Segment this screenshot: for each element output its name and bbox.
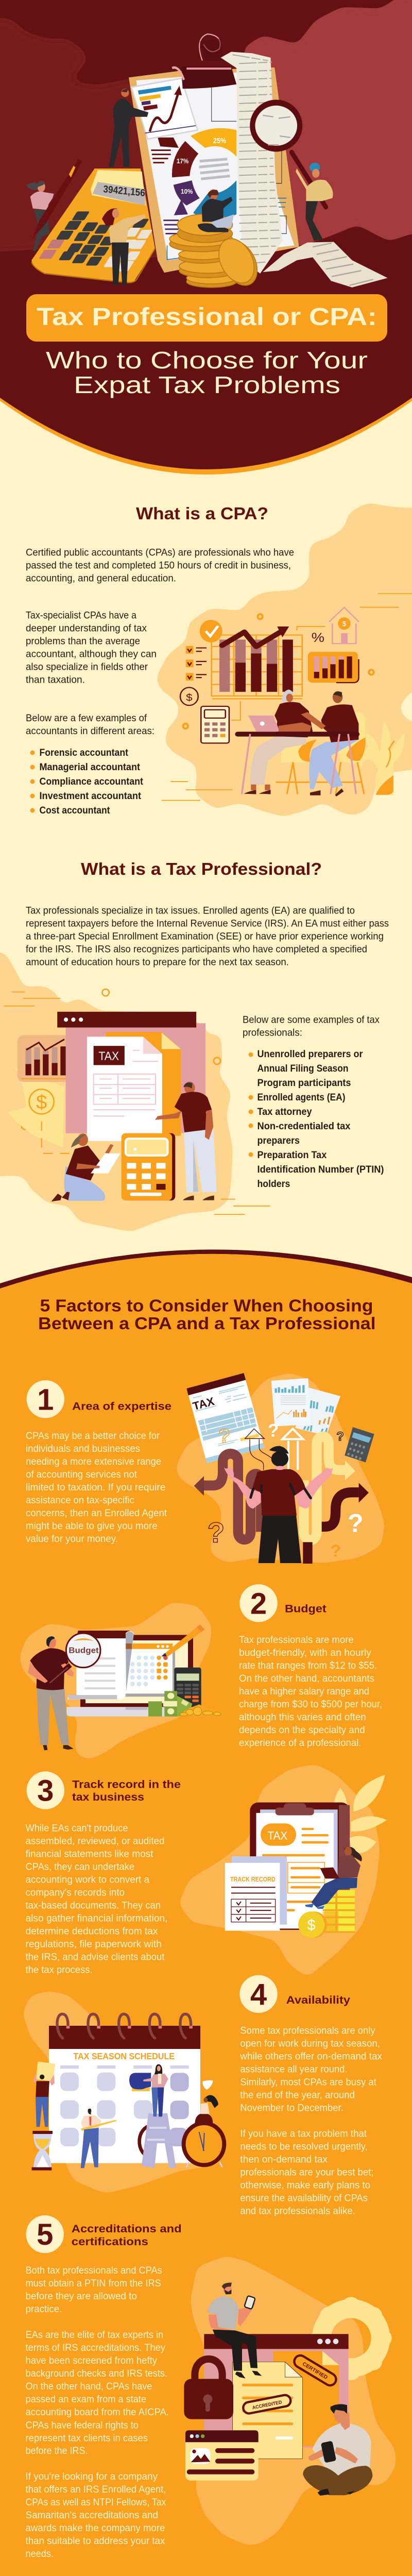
list: accountant types: Forensic accountant [39,747,128,758]
heading: What is a Tax Professional? [81,859,322,878]
panel: what is a tax professional [0,859,389,1232]
factor text: CPAs may be a better choice for [26,1430,160,1442]
icon: calculator [31,168,155,282]
person: man holding magnifier [296,163,333,241]
factor text: accounting board from the AICPA. [26,2406,169,2418]
person: man with magnifier [28,1636,74,1750]
list: tax professional types: Program participants [258,1077,351,1089]
factor text: needs to be resolved urgently, [240,2141,368,2152]
money and coins [148,1691,221,1717]
factor title: Accreditations and [72,2223,182,2235]
icon: clipboard with charts [129,67,299,273]
factor text: value for your money. [26,1533,118,1545]
certified stamp [292,2353,338,2387]
factor text: of accounting services not [26,1469,138,1480]
calendar [49,2014,200,2163]
factor text: concerns, then an Enrolled Agent [26,1507,167,1519]
illustration: accreditation window, lock, gear and people [184,2256,396,2545]
text: tax specialist CPAs: accountant, although they can [26,648,157,659]
icon: dollar circle: $ [186,692,193,703]
list: tax professional types: preparers [258,1135,300,1146]
text: definition: for the IRS. The IRS also recognizes participants who have completed a specified [26,944,367,955]
person: woman on clock [200,2080,218,2114]
factor text: If you have a tax problem that [240,2128,367,2139]
subtitle: Expat Tax Problems [74,371,340,398]
text: definition: amount of education hours to prepare for the next tax season. [26,956,289,968]
factor text: Samaritan's accreditations and [26,2510,158,2521]
person: standing on calculator [109,89,148,167]
factor text [26,1823,168,1976]
icon: red ring behind ladder [140,2126,151,2157]
list: tax professional types: holders [258,1178,290,1190]
person: woman on coins [305,1847,362,1909]
factor text: Some tax professionals are only [240,2025,375,2036]
leaves [8,1067,64,1148]
person: man at desk [301,691,358,796]
icon: percent sign: % [312,631,324,645]
text: tax specialist CPAs: deeper understanding of tax [26,622,147,634]
number badge [239,1584,278,1622]
factor text: budget-friendly, with an hourly [239,1647,371,1658]
factor text: rate that ranges from $12 to $55. [239,1660,377,1671]
icon: clipboard with charts: 25% [213,137,226,145]
subtitle [46,347,368,398]
tax form [186,1373,264,1463]
text: tax specialist CPAs: problems than the average [26,635,140,647]
panel: what is a CPA [26,503,412,817]
factor title: Availability [286,1994,350,2006]
factor title [72,2223,182,2248]
document with accredited stamp [233,2362,303,2459]
person: man sitting cross-legged [303,2404,372,2496]
leaves [334,1775,387,1853]
tax document: TAX [98,1049,119,1063]
icon: checklist [186,646,207,681]
calculator [174,1668,201,1707]
title banner: Tax Professional or CPA: [37,303,377,331]
factor text: that offers an IRS Enrolled Agent, [26,2484,166,2495]
factor text: While EAs can't produce [26,1823,128,1834]
list: tax professional types: Non-credentialed tax [258,1121,351,1132]
text: definition: represent taxpayers before the Internal Revenue Service (IRS). An EA must either pass [26,918,389,929]
scroll document [68,1631,134,1699]
list: tax professional types: Identification Number (PTIN) [258,1164,384,1175]
factor text: assistance on tax-specific [26,1495,134,1506]
profile card [185,2430,259,2481]
clipboard: TAX [267,1829,287,1842]
factor 4: availability [23,1975,382,2216]
track record sheet: TRACK RECORD [230,1875,276,1883]
track record sheet [225,1856,287,1930]
icon: calculator [122,1133,175,1200]
factor text: the tax process. [26,1964,93,1976]
factor text: also gather financial information, [26,1913,168,1924]
chart card [18,1035,70,1082]
list: accountant types: Managerial accountant [39,761,140,773]
factor text: company's records into [26,1887,125,1899]
text: definition: passed the test and completed 150 hours of credit in business, [26,560,291,571]
window [204,2334,349,2448]
document with accredited stamp: ACCREDITED [252,2399,282,2410]
question marks: ? [331,1542,341,1561]
text: tax specialist CPAs [26,609,157,685]
illustration: clipboard, track record and coins [179,1764,387,1977]
number badge: 1 [37,1383,54,1417]
factor text: background checks and IRS tests. [26,2368,167,2379]
question marks: ? [336,1430,344,1444]
factor text: before the IRS. [26,2445,88,2456]
factor text: needs. [26,2548,54,2560]
list: tax professional types: Annual Filing Season [258,1063,348,1074]
factor text: than suitable to address your tax [26,2535,165,2547]
icon: calculator [201,706,229,743]
factor text: Both tax professionals and CPAs [26,2265,162,2276]
factor text: have been screened from hefty [26,2355,157,2366]
text: examples intro: professionals: [243,1027,302,1039]
factor text: assembled, reviewed, or audited [26,1836,164,1847]
question marks [208,1420,364,1561]
clipboard [250,1802,350,1930]
factor text: CPAs, they can undertake [26,1861,134,1873]
factor text: CPAs have federal rights to [26,2419,139,2431]
chairs [276,712,366,794]
illustration: man with magnifier, laptop and money [20,1602,221,1759]
factor title [72,1778,181,1803]
text: definition: a three-part Special Enrollment Examination (SEE) or have prior experience working [26,930,384,942]
factor text [26,2265,169,2560]
certified stamp: CERTIFIED [301,2361,329,2381]
laptop [66,1635,193,1717]
factor text: accounting work to convert a [26,1874,149,1886]
text: examples intro: Below are a few examples of [26,713,147,724]
person: man with big pencil [81,2109,117,2168]
illustration: tax season calendar [23,1991,225,2193]
factor text: have a higher salary range and [239,1686,369,1697]
icon: coin stack [169,214,265,293]
factor text: ensure the availability of CPAs [240,2192,368,2204]
person: man holding note [33,2061,55,2127]
illustration: calculator, clipboard, coins and people [26,34,388,293]
list: accountant types [30,747,143,816]
number badge [27,1380,64,1418]
factor text: tax-based documents. They can [26,1900,161,1911]
winding arrows [202,1429,359,1540]
reports [271,1378,340,1436]
factor text [239,1634,382,1749]
question marks: ? [208,1516,225,1548]
icon: long receipt [221,52,388,287]
factor text: individuals and businesses [26,1443,140,1454]
list: tax professional types: Enrolled agents (EA) [258,1092,345,1103]
illustration: tax document, calculator and people [4,989,270,1214]
icon: calculator [345,1427,374,1462]
icon: dollar coin [29,1089,70,1154]
number badge: 5 [37,2218,53,2251]
person: woman pressing calculator keys [102,208,146,285]
orange document [106,1032,181,1136]
text: tax specialist CPAs: Tax-specialist CPAs have a [26,609,136,621]
factor text: professionals are your best bet; [240,2166,374,2178]
list: tax professional types: Tax attorney [258,1106,312,1117]
text: examples intro: Below are some examples of tax [243,1014,380,1026]
panel: 5 factors section background [0,1249,412,2576]
factor text: If you're looking for a company [26,2471,158,2482]
factor text: passed an exam from a state [26,2394,146,2405]
list: tax professional types: Preparation Tax [258,1149,327,1161]
list: accountant types: Cost accountant [39,805,110,816]
list: accountant types: Investment accountant [39,790,141,802]
factor 2: budget [20,1584,382,1759]
icon: plant [359,721,405,795]
illustration background blob [0,950,233,1232]
factor text: represent tax clients in cases [26,2432,148,2444]
factor text: CPAs as well as NTPI Fellows, Tax [26,2497,166,2508]
text: definition: Tax professionals specialize in tax issues. Enrolled agents (EA) are qualified to [26,905,355,916]
illustration background blob [156,503,412,817]
person: woman on ladder [143,2064,168,2116]
factor text: experience of a professional. [239,1737,362,1749]
text: examples intro [26,713,154,737]
number badge [239,1975,278,2013]
browser window [57,1012,205,1133]
illustration: man at crossroads of arrows [176,1373,385,1564]
factor text: the IRS, and advise clients about [26,1952,165,1963]
number badge [27,1771,64,1809]
title banner [26,294,387,342]
text: examples intro: accountants in different areas: [26,725,154,737]
factor text: terms of IRS accreditations. They [26,2342,165,2353]
heading: What is a CPA? [136,504,268,523]
icon: alarm clock [184,2113,224,2167]
icon: calculator: 39421,156 [103,183,146,198]
factor text: although this varies and often [239,1711,366,1723]
factor text: while others offer on-demand tax [239,2050,382,2062]
tax document [87,1037,162,1141]
factor text: then on-demand tax [240,2154,328,2165]
icon: clip [172,34,236,89]
factor text: financial statements like most [26,1849,153,1860]
tax form: TAX [191,1395,216,1413]
icon: clipboard with charts: 10% [181,188,193,195]
person: bearded man on window [208,2283,262,2379]
factor text: Tax professionals are more [239,1634,354,1646]
icon: house with coin [329,607,359,643]
text: definition: Certified public accountants (CPAs) are professionals who have [26,547,294,558]
text: definition: accounting, and general education. [26,573,176,584]
factor title: Track record in the [72,1778,181,1790]
icon: check badge [200,620,222,642]
factor text: before they are allowed to [26,2291,137,2302]
person: woman with pen [26,158,82,251]
text: definition [26,547,294,584]
factor text: needing a more extensive range [26,1456,161,1467]
factor text: might be able to give you more [26,1520,158,1532]
icon: dollar circle [180,687,198,705]
person: woman with laptop [244,689,313,794]
factor title: Area of expertise [72,1401,171,1413]
factor text [239,2025,382,2216]
factor text: charge from $30 to $500 per hour, [239,1699,382,1710]
factor text: otherwise, make early plans to [240,2179,370,2191]
factor text: assistance all year round. [240,2063,347,2075]
icon: dollar coin: $ [36,1091,47,1113]
factor 5: accreditations and certifications [26,2215,396,2560]
factor text: determine deductions from tax [26,1926,158,1937]
factor text: practice. [26,2303,62,2315]
icon: budget magnifier [66,1633,100,1668]
pencil [161,1624,204,1657]
text: tax specialist CPAs: than taxation. [26,674,85,685]
factor text: must obtain a PTIN from the IRS [26,2278,161,2289]
person: kneeling woman [51,1133,121,1201]
icon: house with coin: $ [342,620,347,628]
person: standing man [155,1081,217,1200]
person: confused man from behind [224,1446,333,1563]
desk [238,734,357,794]
factor text: Similarly, most CPAs are busy at [240,2076,376,2088]
question marks: ? [268,1420,279,1440]
question marks: ? [218,1425,230,1447]
icon: clipboard with charts: 17% [177,157,188,165]
number badge: 3 [37,1774,54,1807]
list: tax professional types [248,1048,384,1190]
number badge: 4 [250,1978,267,2011]
icon: small bar chart card [308,652,358,683]
factor text: awards make the company more [26,2522,165,2534]
factor 3: track record [26,1764,387,1977]
factor text: November to December. [240,2102,344,2113]
factor 1: area of expertise [26,1373,385,1564]
icon: ladder [142,2113,176,2168]
factor text: On the other hand, CPAs have [26,2381,152,2392]
icon: budget magnifier: Budget [68,1646,99,1655]
hero header panel [0,0,412,474]
factor text: and tax professionals alike. [240,2205,355,2216]
factor text [26,1430,167,1545]
factor text: On the other hand, accountants [239,1673,374,1684]
icon: padlock [184,2359,233,2419]
text: definition [26,905,389,968]
icon: magnifying glass [252,103,326,207]
person: sitting on coins with laptop [198,189,234,232]
list: accountant types: Compliance accountant [39,776,143,787]
number badge: 2 [250,1587,267,1621]
factor text: open for work during tax season, [240,2038,380,2049]
calendar: TAX SEASON SCHEDULE [73,2051,175,2061]
factor text: depends on the specialty and [239,1724,365,1736]
coins: $ [307,1917,316,1934]
coins [298,1890,355,1938]
factor title: certifications [72,2236,148,2248]
factor text: the end of the year, around [240,2089,355,2100]
text: tax specialist CPAs: also specialize in fields other [26,661,148,672]
factor text: limited to taxation. If you require [26,1482,165,1493]
factor text: regulations, file paperwork with [26,1939,162,1950]
number badge [26,2215,64,2253]
factor title: Budget [285,1603,327,1615]
question marks: ? [348,1509,364,1537]
icon: hourglass [32,2131,53,2171]
list: tax professional types: Unenrolled preparers or [258,1048,363,1060]
icon: gear [311,2297,392,2380]
bar chart with trend arrow [212,626,302,699]
heading: 5 Factors to Consider When Choosing [40,1296,373,1315]
factor title: tax business [72,1791,144,1803]
heading [38,1296,376,1333]
factor text: EAs are the elite of tax experts in [26,2329,163,2341]
heading: Between a CPA and a Tax Professional [38,1314,376,1333]
illustration: accountants at desk with charts [162,594,412,801]
text: examples intro [243,1014,380,1039]
subtitle: Who to Choose for Your [46,347,368,374]
